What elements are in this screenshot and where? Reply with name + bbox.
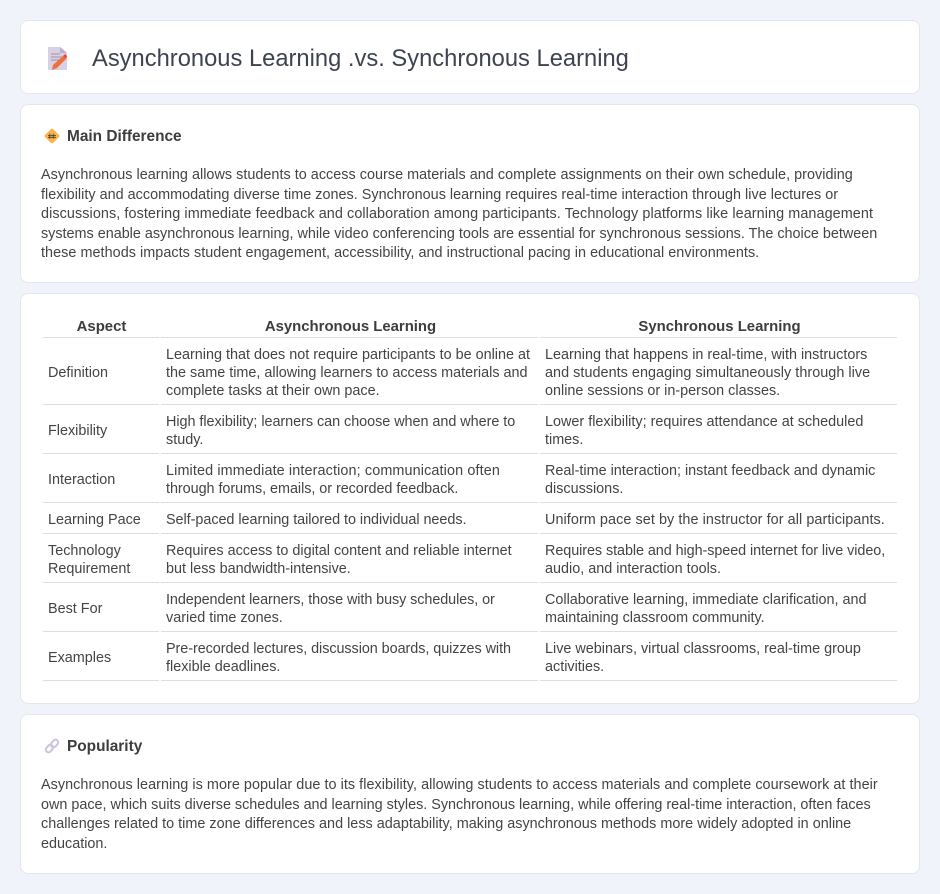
text block: popularity: education. [41,836,107,852]
row: flexibility [48,414,863,448]
text block: main difference: these methods impacts student engagement, accessibility, and instructional pacing in educational environments. [41,245,759,261]
row: definition: Learning that does not require participants to be online at [166,347,530,363]
panel: comparison table [20,293,920,704]
row: best for: Best For [48,601,102,617]
panel: title card [20,20,920,94]
row: best for: Independent learners, those with busy schedules, or [166,592,495,608]
row: interaction: Interaction [48,472,115,488]
panel: main difference [20,104,920,283]
heading: main difference: Main Difference [67,128,182,145]
text block: main difference: flexibility and accommodating diverse time zones. Synchronous learning requires real-time interaction through live lectures or [41,187,838,203]
row: technology requirement: Requires access to digital content and reliable internet [166,543,512,559]
text block: popularity: challenges related to time zone differences and less adaptability, making asynchronous methods more widely adopted in online [41,816,851,832]
heading: popularity: Popularity [67,738,142,755]
row: interaction: through forums, emails, or recorded feedback. [166,481,458,497]
panel: popularity [20,714,920,874]
row: flexibility: High flexibility; learners can choose when and where to [166,414,515,430]
table header: Synchronous Learning [638,319,801,335]
text block: popularity: own pace, which suits diverse schedules and learning styles. Synchronous learning, while offering real-time interaction, often faces [41,797,871,813]
row: learning pace: Uniform pace set by the instructor for all participants. [545,512,885,528]
text block: main difference [41,167,877,261]
row: technology requirement: Requires stable and high-speed internet for live video, [545,543,885,559]
text block: popularity: Asynchronous learning is more popular due to its flexibility, allowing students to access materials and complete coursework at their [41,777,878,793]
row: interaction: Limited immediate interaction; communication often [166,463,500,479]
row: examples: Pre-recorded lectures, discussion boards, quizzes with [166,641,511,657]
row: examples: activities. [545,659,604,675]
row: technology requirement [48,543,885,577]
row: examples [48,641,861,675]
row: technology requirement: but less bandwidth-intensive. [166,561,351,577]
text block: main difference: discussions, fostering immediate feedback and collaboration among participants. Technology platforms like learning management [41,206,873,222]
icon: chain link [44,738,60,754]
row: examples: flexible deadlines. [166,659,280,675]
row: interaction: discussions. [545,481,623,497]
row: definition: Learning that happens in real-time, with instructors [545,347,867,363]
row: learning pace: Self-paced learning tailored to individual needs. [166,512,466,528]
row: flexibility: study. [166,432,203,448]
row: best for: Collaborative learning, immediate clarification, and [545,592,867,608]
table header [77,319,801,335]
row: technology requirement: Requirement [48,561,130,577]
row: definition: and students engaging simultaneously through live [545,365,870,381]
title: Asynchronous Learning .vs. Synchronous Learning [92,46,629,72]
row: interaction: Real-time interaction; instant feedback and dynamic [545,463,875,479]
row: technology requirement: Technology [48,543,121,559]
row: definition [48,347,870,399]
table header: Aspect [77,319,126,335]
row: definition: the same time, allowing learners to access materials and [166,365,528,381]
row: learning pace [48,512,885,528]
icon: diamond warning sign [44,128,60,144]
row: examples: Examples [48,650,111,666]
row: technology requirement: audio, and interaction tools. [545,561,721,577]
text block: main difference: systems enable asynchronous learning, while video conferencing tools are essential for synchronous sessions. The choice between [41,226,877,242]
row: best for: varied time zones. [166,610,283,626]
row: interaction [48,463,875,497]
table header: Asynchronous Learning [265,319,436,335]
row: definition: Definition [48,365,108,381]
row: definition: online sessions or in-person classes. [545,383,780,399]
row: best for: maintaining classroom community. [545,610,765,626]
row: flexibility: Lower flexibility; requires attendance at scheduled [545,414,863,430]
text block: popularity [41,777,878,852]
row: flexibility: times. [545,432,583,448]
icon: document with pencil [48,47,67,70]
text block: main difference: Asynchronous learning allows students to access course materials and complete assignments on their own schedule, providing [41,167,853,183]
row: examples: Live webinars, virtual classrooms, real-time group [545,641,861,657]
row: definition: complete tasks at their own pace. [166,383,380,399]
row: flexibility: Flexibility [48,423,107,439]
row: best for [48,592,867,626]
row: learning pace: Learning Pace [48,512,141,528]
